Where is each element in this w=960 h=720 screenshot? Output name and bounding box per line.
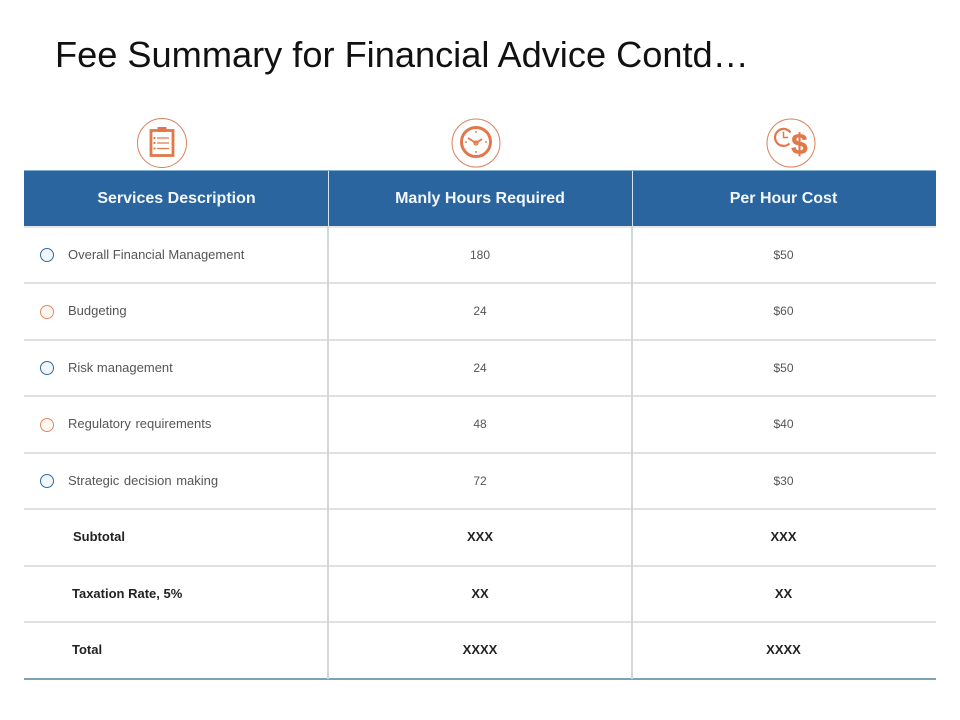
hours: 180 xyxy=(470,248,490,262)
hours: XXXX xyxy=(463,642,497,657)
label: Taxation Rate, 5% xyxy=(72,586,182,601)
marker: blue circle xyxy=(40,361,54,375)
cost: $50 xyxy=(773,361,794,375)
cost: XXXX xyxy=(766,642,801,657)
hours: 48 xyxy=(473,417,487,431)
label: Risk management xyxy=(68,360,173,375)
label: Overall Financial Management xyxy=(68,247,244,262)
row: overall financial management xyxy=(40,247,794,262)
title: Fee Summary for Financial Advice Contd… xyxy=(55,34,749,75)
row: total xyxy=(72,642,801,657)
marker: blue circle xyxy=(40,248,54,262)
table header xyxy=(24,170,936,226)
marker: orange circle xyxy=(40,418,54,432)
icon: time and dollar: $ xyxy=(791,129,808,161)
row: strategic decision making xyxy=(40,473,794,488)
icon: clock xyxy=(452,118,500,168)
label: Subtotal xyxy=(73,529,125,544)
cost: $60 xyxy=(773,304,794,318)
header: per hour cost: Per Hour Cost xyxy=(730,190,837,207)
header: services description: Services Description xyxy=(97,190,256,207)
cost: $50 xyxy=(773,248,794,262)
hours: XXX xyxy=(467,529,493,544)
cost: XXX xyxy=(770,529,797,544)
cost: XX xyxy=(775,586,792,601)
icon: time and dollar xyxy=(766,118,816,168)
hours: 72 xyxy=(473,474,487,488)
icon: clipboard xyxy=(137,118,187,168)
row: taxation rate xyxy=(72,586,792,601)
marker: orange circle xyxy=(40,305,54,319)
cost: $40 xyxy=(773,417,794,431)
row: risk management xyxy=(40,360,794,375)
hours: 24 xyxy=(473,304,487,318)
row: subtotal xyxy=(73,529,797,544)
label: Budgeting xyxy=(68,303,127,318)
hours: XX xyxy=(471,586,489,601)
label: Total xyxy=(72,642,102,657)
hours: 24 xyxy=(473,361,487,375)
header: manly hours required: Manly Hours Required xyxy=(395,190,565,207)
cost: $30 xyxy=(773,474,794,488)
marker: blue circle xyxy=(40,474,54,488)
label: Regulatory requirements xyxy=(68,416,211,431)
row: budgeting xyxy=(40,303,794,319)
row: regulatory requirements xyxy=(40,416,794,432)
label: Strategic decision making xyxy=(68,473,218,488)
